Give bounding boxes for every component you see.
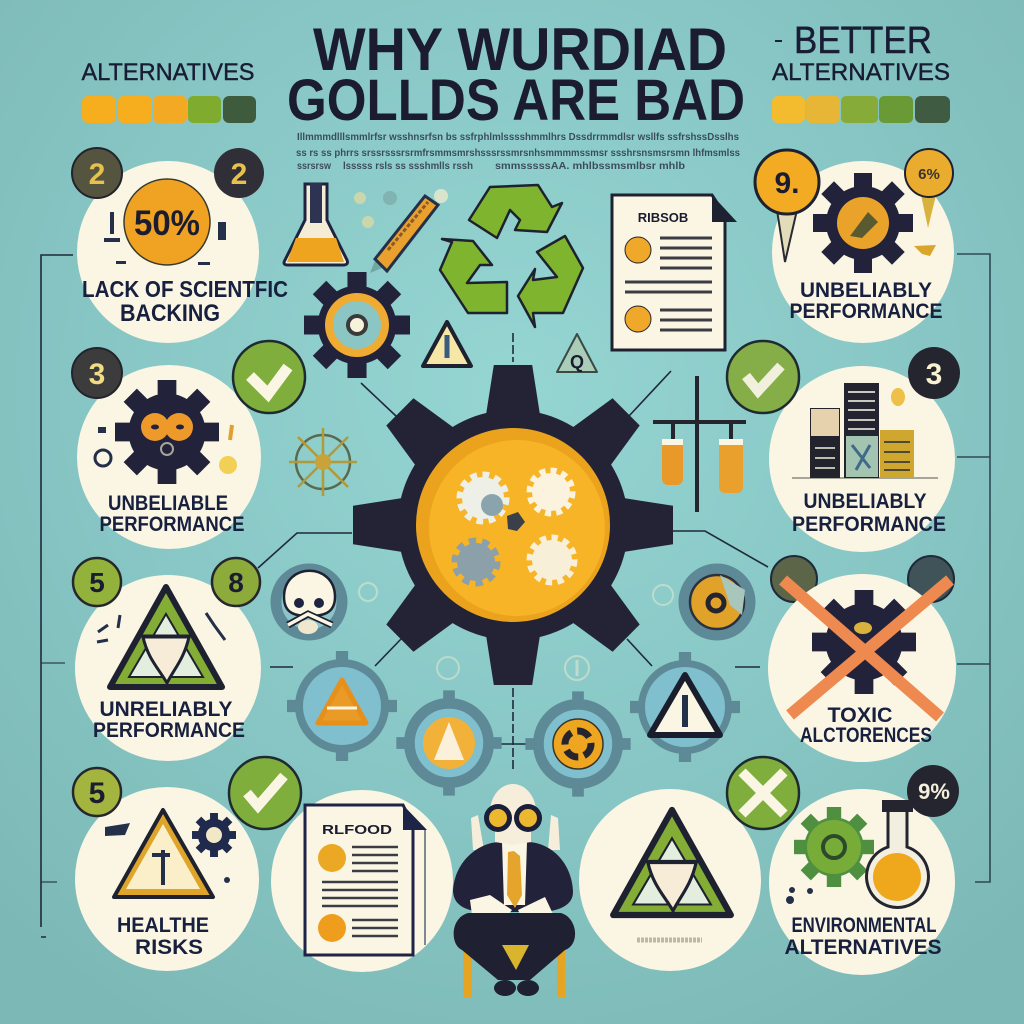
icon: compass wheel (289, 428, 357, 496)
left legend: alternatives: ALTERNATIVES (82, 59, 254, 86)
scattered marks (104, 212, 226, 265)
label: UNBELIABLY (804, 490, 926, 513)
icon: percent coin (124, 179, 210, 265)
badge: 9% (907, 765, 959, 817)
icon: green triangle (613, 810, 731, 915)
badge: 3 (72, 348, 122, 398)
panel: document circle (271, 790, 453, 972)
label: TOXIC (828, 704, 892, 727)
title: GOLLDS ARE BAD (287, 68, 745, 133)
icon: dark gear (115, 380, 219, 484)
right legend: better alternatives: ALTERNATIVES (772, 59, 950, 86)
panel: unreliably performance right with books (769, 347, 960, 552)
faint glyphs (359, 583, 673, 680)
subtitle text block: lsssss rsls ss ssshmlls rssh (343, 161, 473, 172)
label: LACK OF SCIENTFIC (82, 276, 288, 302)
icon: document (305, 805, 427, 955)
panel: unreliable performance 1 (72, 341, 305, 549)
label: PERFORMANCE (790, 300, 942, 323)
icon: green check (229, 757, 301, 829)
icon: orange warning gear (287, 651, 397, 761)
left legend: alternatives (82, 59, 256, 123)
scattered marks (95, 425, 237, 474)
icon: percent coin: 50% (134, 204, 200, 243)
faint caption (637, 938, 702, 942)
label: HEALTHE (117, 914, 209, 937)
icon: green triangle (110, 587, 222, 687)
label: PERFORMANCE (93, 719, 245, 742)
scattered marks (786, 887, 813, 904)
label (784, 914, 942, 959)
icon: small grey triangle (557, 334, 597, 372)
icon: dark gear (812, 590, 916, 694)
badge: 2 right (214, 148, 264, 198)
icon: small gear (192, 813, 236, 857)
icon: green check (727, 341, 799, 413)
badge: 2 left (72, 148, 122, 198)
badge: 5 (73, 768, 121, 816)
panel: environmental alternatives (769, 765, 959, 975)
subtitle text block (296, 132, 740, 172)
scattered marks (97, 613, 225, 642)
label: UNBELIABLE (108, 492, 228, 515)
panel: toxic alternatives (768, 556, 956, 762)
label: ENVIRONMENTAL (792, 914, 937, 937)
icon: gear (813, 173, 913, 273)
icon: balance scale (653, 376, 746, 512)
label: PERFORMANCE (100, 513, 244, 536)
subtitle text block: Illmmmdlllsmmlrfsr wsshnsrfsn bs ssfrphlmlsssshmmlhrs Dssdrrmmdlsr wsllfs ssfrshssDsslhs (297, 132, 739, 143)
label (117, 914, 209, 959)
subtitle text block: ssrsrsw (297, 161, 331, 172)
panel: lack of scientific backing (72, 148, 288, 343)
label (93, 698, 245, 742)
badge: 8: 8 (228, 567, 244, 598)
icon: document (612, 195, 737, 350)
icon: yellow triangle (114, 810, 213, 897)
label (800, 704, 932, 747)
icon: flask (866, 800, 929, 908)
badge: 2 left: 2 (89, 158, 105, 191)
icon: document: RLFOOD (322, 822, 392, 837)
scattered marks (105, 823, 230, 883)
icon: flask (284, 183, 348, 265)
connector lines (41, 254, 990, 937)
label (82, 276, 288, 327)
icon: skull (276, 569, 342, 635)
badge: 5: 5 (89, 567, 105, 598)
icon: chart books (792, 383, 938, 478)
badge: 3 (908, 347, 960, 399)
badge: 3: 3 (926, 358, 942, 391)
label: UNBELIABLY (800, 279, 932, 302)
icon: small grey triangle: Q (570, 352, 584, 372)
icon: warning gear (630, 652, 740, 762)
title (287, 16, 745, 133)
badge: 2 right: 2 (231, 158, 247, 191)
figure: seated man with goggles (453, 784, 575, 997)
icon: warning triangle (423, 322, 471, 366)
label: ALTERNATIVES (784, 936, 942, 959)
label: UNRELIABLY (100, 698, 232, 721)
icon: pin right: 6% (918, 166, 940, 183)
scattered marks (914, 245, 936, 256)
label (100, 492, 244, 536)
label: RISKS (135, 936, 203, 959)
label (790, 279, 942, 323)
subtitle text block: ss rs ss phrrs srssrsssrsrmfrsmmsmrshsssrssmrsnhsmmmmssmsr ssshrsnsmsrsmn lhfmsmlss (296, 148, 740, 159)
icon: pin right (905, 149, 953, 228)
badge: 5 (73, 558, 121, 606)
icon: small gear (304, 272, 410, 378)
badge: 8 (212, 558, 260, 606)
right legend: better alternatives (772, 20, 950, 123)
label: ALCTORENCES (800, 724, 932, 747)
icon: pin left: 9. (774, 167, 800, 200)
label: BACKING (120, 300, 220, 327)
faint marks near pen (354, 191, 397, 228)
right legend: better alternatives: BETTER (794, 20, 932, 62)
icon: green check (233, 341, 305, 413)
badge: 9%: 9% (918, 779, 950, 804)
icon: pen (370, 189, 448, 273)
panel: unreliably performance left (73, 558, 261, 761)
title: WHY WURDIAD (313, 16, 727, 83)
badges (771, 556, 954, 602)
icon: recycling arrows (440, 185, 583, 327)
icon: green cross (727, 757, 799, 829)
subtitle text block: smmsssssAA. mhlbssmsmlbsr mhlb (495, 161, 685, 172)
label: PERFORMANCE (792, 513, 946, 536)
panel: health risks (73, 757, 301, 971)
badge: 3: 3 (89, 358, 105, 391)
icon: document: RIBSOB (638, 210, 688, 225)
label (792, 490, 946, 536)
panel: green triangle circle (579, 789, 761, 971)
icon: pin left (755, 150, 819, 262)
icon: tree coin gear (396, 690, 502, 796)
panel: unreliably performance top right (755, 149, 954, 343)
icon: green gear (794, 807, 874, 887)
icon: orange cross (783, 580, 950, 717)
icon: hazard dial (684, 569, 750, 635)
cogs inside gear (457, 473, 572, 581)
badge: 5: 5 (89, 777, 105, 810)
central gear (353, 365, 673, 685)
icon: radiation gear (525, 691, 631, 797)
